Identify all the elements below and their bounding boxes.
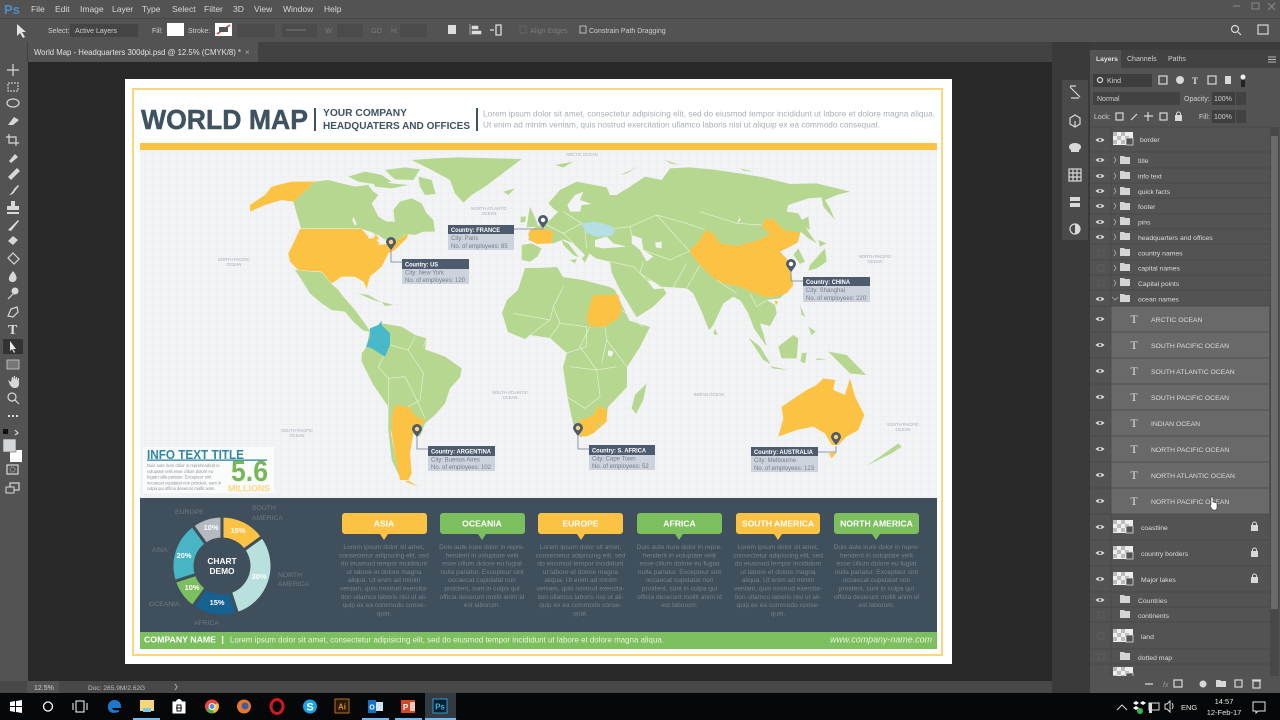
icon: illustrator [335, 699, 349, 713]
icon: powerpoint: P [403, 703, 409, 712]
icon: windows [10, 700, 22, 713]
callout: France: City: Paris [451, 236, 478, 242]
donut chart: AMERICA [278, 581, 309, 588]
card: Europe: quip ex ea commodo conse- [539, 602, 622, 609]
callout: South Africa: No. of employees: 52 [592, 464, 649, 470]
filter row: T [1192, 76, 1198, 86]
card: North America: Duis aute irure dolor in repre- [834, 544, 919, 551]
layer group rows: footer [1138, 204, 1156, 211]
card: North America: proident, sunt in culpa qui [839, 586, 915, 592]
icon: opera [271, 700, 283, 714]
card: North America: est laborum. [858, 602, 895, 609]
locked and lower layers: Countries [1138, 598, 1168, 605]
donut chart: ASIA [152, 547, 168, 554]
ocean names: NORTH PACIFIC [218, 257, 250, 262]
layers panel [1090, 42, 1280, 693]
options bar: H: [391, 28, 398, 35]
text layers [1096, 312, 1235, 508]
USA [288, 229, 408, 288]
card: Oceania: Duis aute irure dolor in repre- [439, 544, 525, 551]
South Africa [579, 406, 607, 437]
info text box: voluptate velit esse cillum dolore eu [147, 469, 214, 474]
card: Africa: occaecat cupidatat non [646, 577, 714, 584]
callout: US [386, 237, 469, 284]
icon: edge [108, 700, 121, 713]
title [141, 104, 478, 135]
ocean names: NORTH PACIFIC [859, 254, 891, 259]
card: Oceania: esse cillum dolore eu fugiat [442, 561, 522, 568]
card: Oceania: occaecat cupidatat non [448, 577, 516, 584]
info text box: culpa qui officia deserunt mollit anim. [147, 486, 216, 491]
callout: Australia: No. of employees: 123 [754, 466, 815, 472]
callout: France: No. of employees: 85 [451, 244, 508, 250]
South-East Asia islands [713, 305, 827, 370]
callout: China: No. of employees: 220 [806, 296, 867, 302]
text layers: T [1130, 364, 1138, 378]
system tray: 12-Feb-17 [1207, 708, 1241, 717]
ocean names: ARCTIC OCEAN [566, 152, 598, 157]
layers panel: Channels [1127, 56, 1157, 63]
text layers: ARCTIC OCEAN [1151, 317, 1202, 324]
text layers: NORTH PACIFIC OCEAN [1151, 447, 1229, 454]
blend mode row [1093, 92, 1246, 105]
card: Africa: proident, sunt in culpa qui [642, 586, 718, 592]
dark regions panel [140, 498, 937, 632]
text layers: SOUTH ATLANTIC OCEAN [1151, 369, 1235, 376]
card: Asia: aliqua. Ut enim ad minim [348, 577, 421, 584]
card: Europe: quat. [573, 610, 588, 617]
Australia [778, 378, 864, 445]
ocean names: OCEAN [227, 262, 241, 267]
card: Oceania: henderit in voluptate velit [446, 552, 519, 559]
menu bar: Edit [55, 4, 70, 14]
card: South America: quip ex ea commodo conse- [737, 602, 819, 609]
Japan and Korea [793, 217, 827, 271]
callout: South Africa: City: Cape Town [592, 456, 636, 462]
ocean names: NORTH ATLANTIC [471, 206, 507, 211]
Iberia [522, 243, 542, 262]
menu bar: Filter [204, 4, 223, 14]
layer group rows [1096, 156, 1213, 304]
Madagascar [632, 383, 647, 414]
Arctic islands [555, 160, 753, 175]
callout: Argentina: City: Buenos Aires [431, 458, 480, 464]
blend mode row: Opacity: [1184, 96, 1210, 103]
text layers: T [1130, 442, 1138, 456]
ocean names: SOUTH ATLANTIC [492, 390, 528, 395]
highlighted text layers [1111, 306, 1269, 514]
Caribbean [358, 293, 393, 306]
layer: border [1096, 132, 1160, 145]
icon: outlook: O [369, 704, 375, 712]
title: YOUR COMPANY [323, 108, 407, 119]
donut chart: DEMO [209, 566, 235, 576]
card: Oceania: OCEANIA [462, 518, 502, 528]
card: Europe: aliqua. Ut enim ad minim [544, 577, 617, 584]
card: South America: ut labore et dolore magna [740, 569, 816, 576]
icon: photoshop [425, 693, 456, 720]
lock row: Lock: [1094, 114, 1111, 121]
options bar: W: [325, 28, 333, 35]
callout: France [448, 215, 548, 250]
locked and lower layers: land [1141, 634, 1154, 641]
card: Africa: Duis aute irure dolor in repre- [637, 544, 722, 551]
Argentina [392, 406, 425, 480]
Sudan [587, 295, 622, 327]
card: Asia: do eiusmod tempor incididunt [341, 561, 427, 568]
text layers: NORTH ATLANTIC OCEAN [1151, 473, 1235, 480]
card: Europe [536, 513, 626, 617]
card: South America: Lorem ipsum dolor sit amet, [737, 544, 819, 551]
France [528, 228, 553, 244]
icon: chrome [205, 700, 219, 714]
Canada [293, 167, 515, 243]
New Guinea [828, 352, 866, 375]
icon: powerpoint [395, 700, 422, 720]
callout: China [786, 259, 870, 302]
blend mode row: 100% [1214, 96, 1232, 103]
ocean names: OCEAN [896, 427, 910, 432]
menu bar: Type [142, 4, 161, 14]
card: Europe: Lorem ipsum dolor sit amet, [540, 544, 621, 551]
menu bar: Window [283, 4, 314, 14]
icon: search [44, 702, 52, 711]
card: North America: officia deserunt mollit anim id [834, 594, 919, 601]
icon: file explorer [133, 700, 160, 720]
document tab bar: World Map - Headquarters 300dpi.psd @ 12.5% (CMYK/8) * [34, 48, 241, 57]
card: South America: tion ullamco laboris nisi ut ali- [735, 594, 821, 601]
lock row: 100% [1214, 114, 1232, 121]
footer: COMPANY NAME [144, 634, 216, 644]
Central America [295, 270, 370, 332]
info text box: fugiat nulla pariatur. Excepteur sint [147, 475, 212, 480]
layer row separators [1090, 127, 1270, 676]
card: Africa: esse cillum dolore eu fugiat [640, 561, 720, 568]
card: South America: SOUTH AMERICA [742, 518, 814, 528]
info text box: INFO TEXT TITLE [147, 448, 244, 462]
icon: skype: S [306, 702, 314, 714]
locked and lower layers: coastline [1141, 525, 1168, 532]
world map: eurasia, africa, oceania [502, 160, 902, 466]
layer group rows: capital names [1138, 266, 1181, 272]
intro text [483, 108, 935, 130]
text layers: SOUTH PACIFIC OCEAN [1151, 343, 1229, 350]
Greenland [412, 157, 522, 203]
donut chart: 15% [210, 598, 225, 607]
donut chart: 15% [231, 526, 246, 535]
canvas area [28, 62, 1052, 681]
callout: US: Country: US [405, 262, 439, 268]
card: Europe: ut labore et dolore magna [543, 569, 618, 576]
donut chart: OCEANIA [149, 601, 180, 608]
layer group rows: info text [1138, 174, 1162, 180]
taskbar [0, 693, 1280, 720]
callout: Australia: City: Melbourne [754, 458, 797, 464]
New Zealand [867, 443, 902, 466]
blend mode row: Normal [1097, 96, 1120, 103]
options bar: Align Edges [530, 28, 568, 35]
text layers: INDIAN OCEAN [1151, 421, 1200, 428]
card: Africa: officia deserunt mollit anim id [637, 594, 722, 601]
title: WORLD MAP [141, 104, 308, 135]
layer group rows: headquarters and offices [1138, 235, 1213, 242]
status bar [0, 681, 1052, 693]
callout: South Africa: Country: S. AFRICA [592, 448, 646, 454]
Eurasia [528, 167, 850, 347]
callout: Argentina: No. of employees: 102 [431, 465, 492, 471]
text layers: NORTH PACIFIC OCEAN [1151, 499, 1229, 506]
tools panel: T [8, 323, 18, 338]
card: North America: NORTH AMERICA [840, 518, 913, 528]
text layers: T [1130, 416, 1138, 430]
callout: China: Country: CHINA [806, 279, 850, 286]
ocean names: OCEAN [503, 395, 517, 400]
South America [362, 323, 462, 437]
donut chart: SOUTH [252, 505, 276, 512]
donut chart: 30% [252, 572, 267, 581]
card: Africa: nulla pariatur. Excepteur sint [638, 569, 721, 576]
layer group rows: pins [1138, 220, 1151, 226]
text layers: T [1130, 312, 1138, 326]
layer group rows: title [1138, 158, 1149, 165]
footer [140, 632, 937, 649]
lock row [1094, 110, 1246, 123]
panel footer icons: fx [1163, 682, 1169, 689]
status bar: 12.5% [34, 685, 54, 692]
layer group rows: ocean names [1138, 296, 1179, 304]
options bar: Fill: [152, 28, 163, 35]
callout: France: Country: FRANCE [451, 227, 501, 234]
card: Asia: tion ullamco laboris nisi ut ali- [341, 594, 427, 601]
card: North America: occaecat cupidatat non [843, 577, 911, 584]
callout: China: City: Shanghai [806, 288, 845, 294]
menu bar: Select [172, 4, 196, 14]
footer: Lorem ipsum dolor sit amet, consectetur adipisicing elit, sed do eiusmod tempor incididunt ut labore et dolore magna aliqua. [230, 634, 664, 644]
info text box: MILLIONS [228, 482, 270, 494]
locked and lower layers: dotted map [1138, 655, 1172, 662]
tools panel [0, 42, 27, 693]
donut chart: 10% [204, 523, 219, 532]
card: Asia: quip ex ea commodo conse- [343, 602, 425, 609]
card: South America: consectetur adipiscing elit, sed [733, 552, 823, 559]
icon: outlook [362, 700, 389, 720]
card: South America [733, 513, 823, 617]
card: Africa: est laborum. [661, 602, 698, 609]
system tray [1117, 697, 1265, 717]
Alaska [250, 182, 315, 212]
menu bar: Ps [4, 2, 20, 17]
text layers: T [1130, 338, 1138, 352]
filter row [1093, 74, 1246, 87]
menu bar: Layer [112, 4, 133, 14]
China [689, 218, 800, 297]
card: South America: do eiusmod tempor incididunt [735, 561, 821, 568]
menu bar: 3D [233, 4, 244, 14]
card: South America: quat. [771, 610, 785, 617]
options bar [0, 18, 1280, 42]
donut chart: EUROPE [175, 509, 204, 516]
card: Africa: henderit in voluptate velit [643, 552, 716, 559]
callout: Argentina [412, 424, 495, 471]
ocean names [218, 152, 919, 438]
icon: task view [73, 701, 87, 712]
card: Asia: quat. [377, 610, 391, 617]
status bar: Doc: 265.9M/2.62G [88, 685, 145, 692]
options bar: Constrain Path Dragging [589, 28, 666, 35]
callout: US: No. of employees: 120 [405, 278, 466, 284]
ocean names: SOUTH PACIFIC [887, 422, 919, 427]
panel footer icons [1090, 676, 1280, 693]
donut chart: 20% [177, 551, 192, 560]
text layers: T [1130, 494, 1138, 508]
ocean names: OCEAN [482, 211, 496, 216]
menu bar: Help [324, 4, 342, 14]
card: Asia: ut labore et dolore magna [346, 569, 422, 576]
card: Oceania: est laborum. [464, 602, 500, 609]
card: Oceania: proident, sunt in culpa qui [444, 586, 520, 592]
locked and lower layers: Major lakes [1141, 577, 1176, 584]
menu bar [0, 0, 1280, 18]
card: North America: henderit in voluptate velit [840, 552, 913, 559]
locked and lower layers: country borders [1141, 551, 1189, 558]
footer: www.company-name.com [830, 634, 932, 644]
menu bar: Image [80, 4, 104, 14]
card: Africa: AFRICA [663, 518, 696, 528]
card: North America [834, 513, 919, 609]
card: Asia: consectetur adipiscing elit, sed [339, 552, 429, 559]
ocean names: OCEAN [868, 259, 882, 264]
ocean names: INDIAN OCEAN [694, 392, 724, 397]
country borders [513, 212, 767, 408]
Africa [502, 267, 650, 437]
document tab bar [0, 42, 1090, 62]
text layers: SOUTH PACIFIC OCEAN [1151, 395, 1229, 402]
text layers: T [1130, 390, 1138, 404]
card: Europe: tion ullamco laboris nisi ut ali- [537, 594, 624, 601]
icon: store [173, 700, 185, 713]
options bar: GO [371, 28, 382, 35]
icon: skype [303, 700, 317, 714]
layer group rows: quick facts [1138, 189, 1171, 196]
intro text: Ut enim ad minim veniam, quis nostrud exercitation ullamco laboris nisi ut aliquip ex ea commodo consequat. [483, 120, 880, 130]
card: Europe: veniam, quis nostrud exercita- [537, 586, 624, 592]
callout: US: City: New York [405, 270, 445, 276]
South America borders [378, 337, 427, 418]
title: HEADQUATERS AND OFFICES [323, 121, 470, 132]
options bar: Stroke: [188, 28, 210, 35]
text layers: T [1130, 468, 1138, 482]
info text box: occaecat cupidatat non proident, sunt in [147, 480, 222, 485]
layers panel: Paths [1168, 56, 1186, 63]
donut chart: 10% [185, 583, 200, 592]
intro text: Lorem ipsum dolor sit amet, consectetur adipisicing elit, sed do eiusmod tempor incididunt ut labore et dolore magna aliqua. [483, 108, 935, 118]
callout: Argentina: Country: ARGENTINA [431, 448, 491, 456]
yellow divider bar [140, 143, 937, 150]
filter row: Kind [1107, 78, 1121, 85]
world map: americas [250, 157, 522, 487]
card: Asia: veniam, quis nostrud exercita- [340, 586, 428, 592]
locked and lower layers: continents [1138, 613, 1170, 620]
Italy [562, 240, 579, 263]
icon: illustrator: Ai [338, 702, 346, 712]
card: Europe: do eiusmod tempor incididunt [537, 561, 624, 568]
layer: border: border [1140, 137, 1160, 144]
card: Europe: EUROPE [562, 518, 599, 528]
donut chart: AFRICA [194, 620, 219, 627]
Colombia [366, 321, 390, 357]
menu bar: View [254, 4, 273, 14]
system tray: ENG [1181, 703, 1197, 712]
donut chart [149, 505, 309, 627]
card: North America: nulla pariatur. Excepteur sint [835, 569, 918, 576]
United Kingdom and Ireland [521, 207, 538, 227]
info text box [143, 447, 274, 494]
icon: firefox [237, 700, 251, 714]
donut chart: NORTH [278, 572, 302, 579]
card: Oceania [439, 513, 525, 609]
options bar: Active Layers [75, 28, 118, 35]
info text box: 5.6 [231, 456, 268, 488]
card: Europe: consectetur adipiscing elit, sed [536, 552, 626, 559]
system tray: 14:57 [1215, 697, 1233, 706]
card: South America: veniam, quis nostrud exercita- [734, 586, 822, 592]
callout: Australia: Country: AUSTRALIA [754, 449, 813, 456]
Ukraine [582, 222, 615, 237]
menu bar: File [31, 4, 45, 14]
info text box: Duis aute irure dolor in reprehenderit in [147, 463, 220, 468]
ocean names: OCEAN [290, 433, 304, 438]
card: North America: esse cillum dolore eu fugiat [837, 561, 917, 568]
layer group rows: country names [1138, 250, 1183, 258]
callout: Australia [751, 432, 841, 472]
card: Africa [637, 513, 722, 609]
layers panel: Layers [1096, 56, 1118, 63]
collapsed panel icons [1062, 42, 1090, 693]
layer group rows: Capital points [1138, 281, 1180, 288]
options bar: Select: [48, 28, 69, 35]
locked and lower layers [1096, 520, 1258, 680]
card: Oceania: officia deserunt mollit anim id [440, 594, 525, 601]
donut chart: AMERICA [252, 515, 283, 522]
document page [125, 79, 952, 664]
lock row: Fill: [1199, 114, 1210, 121]
donut chart: CHART [207, 556, 238, 566]
Great Lakes [352, 217, 387, 242]
document tab bar: × [245, 48, 250, 57]
card: Oceania: nulla pariatur. Excepteur sint [440, 569, 524, 576]
inland seas [567, 192, 741, 288]
callout: South Africa [573, 423, 655, 470]
map background [140, 150, 937, 498]
ocean names: SOUTH PACIFIC [281, 428, 313, 433]
card: Asia [339, 513, 429, 617]
card: Asia: Lorem ipsum dolor sit amet, [343, 544, 425, 551]
panel scrollbar [1270, 127, 1279, 676]
card: South America: aliqua. Ut enim ad minim [742, 577, 815, 584]
Chile coast [388, 406, 402, 481]
icon: photoshop: Ps [435, 702, 445, 712]
icon: hand cursor [1210, 497, 1217, 510]
card: Asia: ASIA [374, 518, 394, 528]
